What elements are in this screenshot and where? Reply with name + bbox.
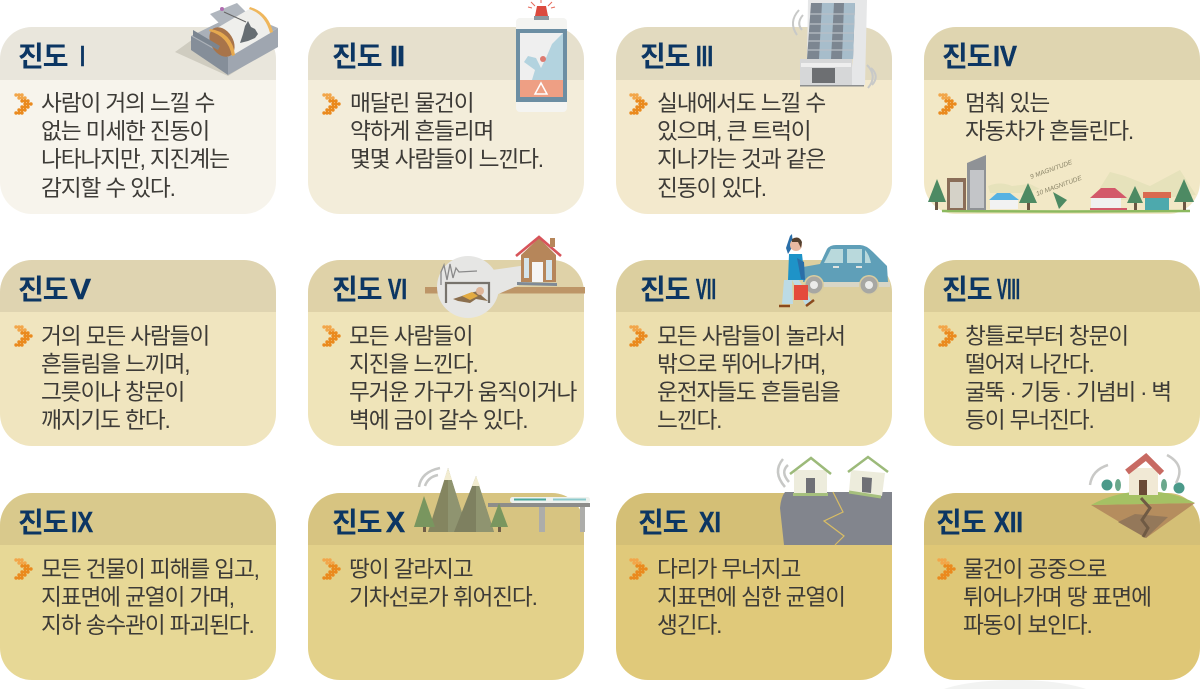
text: description: 나타나지만, 지진계는 — [41, 146, 229, 172]
heading: 진도 IV — [942, 41, 1018, 73]
panel: 진도 VIII — [924, 260, 1200, 446]
text: description: 깨지기도 한다. — [41, 407, 170, 433]
icon: arrow — [629, 325, 648, 347]
text: description: 몇몇 사람들이 느낀다. — [350, 146, 543, 172]
text: description — [965, 90, 1133, 144]
heading: 진도 VII — [640, 274, 716, 306]
text: description — [657, 323, 845, 433]
heading: 진도 XII: XII — [994, 507, 1023, 539]
icon: arrow — [322, 325, 341, 347]
text: description: 실내에서도 느낄 수 — [657, 90, 825, 116]
text: description: 거의 모든 사람들이 — [41, 323, 209, 349]
icon: person and car — [779, 234, 890, 306]
text: description: 진동이 있다. — [657, 175, 766, 201]
heading: 진도 XI — [638, 507, 721, 539]
text: description — [41, 90, 229, 201]
text: description — [349, 323, 578, 433]
icon: houses on cracked ground — [778, 457, 892, 545]
heading: 진도 X: 진도 — [332, 507, 382, 538]
heading: 진도 XI: XI — [699, 507, 721, 539]
heading: 진도 I: I — [80, 41, 85, 73]
text: description: 굴뚝 · 기둥 · 기념비 · 벽 — [965, 379, 1171, 405]
panel: 진도 IX — [0, 493, 276, 680]
heading: 진도 III: III — [696, 41, 713, 73]
text: description: 밖으로 뛰어나가며, — [657, 351, 825, 377]
icon: arrow — [629, 93, 648, 115]
text: description: 멈춰 있는 — [965, 90, 1049, 116]
icon: arrow — [14, 93, 33, 115]
heading: 진도 VI: 진도 — [332, 274, 382, 305]
text: description — [350, 90, 543, 172]
heading: 진도 XI: 진도 — [638, 507, 688, 538]
icon: arrow — [938, 325, 957, 347]
text: description — [349, 556, 537, 610]
text: description: 기차선로가 휘어진다. — [349, 584, 537, 610]
heading: 진도 V — [18, 274, 92, 306]
heading: 진도 III — [640, 41, 713, 73]
heading: 진도 I: 진도 — [18, 41, 68, 72]
heading: 진도 X: X — [386, 507, 406, 539]
icon: arrow — [14, 325, 33, 347]
heading: 진도 II — [332, 41, 405, 73]
panel: 진도 I — [0, 3, 278, 214]
text: description: 사람이 거의 느낄 수 — [41, 90, 215, 116]
text: description: 매달린 물건이 — [350, 90, 474, 116]
text: description: 지표면에 균열이 가며, — [41, 584, 234, 610]
text: description: 벽에 금이 갈수 있다. — [349, 407, 527, 433]
text: description: 운전자들도 흔들림을 — [657, 379, 840, 405]
icon: phone with siren — [516, 0, 567, 112]
icon: shaking building — [793, 0, 876, 88]
icon: house on floating island — [1090, 455, 1195, 538]
heading: 진도 VII: 진도 — [640, 274, 690, 305]
heading: 진도 VIII: 진도 — [942, 274, 992, 305]
text: description: 등이 무너진다. — [965, 407, 1094, 433]
text: description: 지진을 느낀다. — [349, 351, 478, 377]
heading: 진도 IV: 진도 — [942, 41, 992, 72]
panel: 진도 VII — [616, 234, 892, 446]
heading: 진도 XII: 진도 — [936, 507, 986, 538]
text: description: 파동이 보인다. — [963, 612, 1092, 638]
text: description: 없는 미세한 진동이 — [41, 118, 209, 144]
text: description — [965, 323, 1171, 433]
text: description: 흔들림을 느끼며, — [41, 351, 189, 377]
heading: 진도 VII: VII — [696, 274, 716, 306]
panel: 진도 VI — [308, 237, 585, 446]
text: description: 모든 사람들이 놀라서 — [657, 323, 845, 349]
text: description — [657, 556, 845, 638]
heading: 진도 IX: IX — [71, 507, 94, 539]
text: description: 모든 건물이 피해를 입고, — [41, 556, 259, 582]
heading: 진도 VI — [332, 274, 407, 306]
text: description: 지하 송수관이 파괴된다. — [41, 612, 254, 638]
text: description: 생긴다. — [657, 612, 721, 638]
text: description: 약하게 흔들리며 — [350, 118, 493, 144]
panel: 진도 II — [308, 0, 584, 214]
text: description — [963, 556, 1151, 638]
text: description: 지표면에 심한 균열이 — [657, 584, 845, 610]
text: description: 있으며, 큰 트럭이 — [657, 118, 811, 144]
heading: 진도 V: 진도 — [18, 274, 68, 305]
heading: 진도 VIII — [942, 274, 1020, 306]
panel: 진도 XI — [616, 457, 892, 680]
text: description: 물건이 공중으로 — [963, 556, 1106, 582]
heading: 진도 VI: VI — [388, 274, 407, 306]
heading: 진도 II: II — [390, 41, 405, 73]
heading: 진도 IX: 진도 — [18, 507, 68, 538]
icon: arrow — [322, 93, 341, 115]
illustration: town with waves: 10 MAGNITUDE — [1035, 175, 1083, 198]
icon: seismograph — [175, 3, 278, 76]
text: description: 다리가 무너지고 — [657, 556, 800, 582]
text: description: 창틀로부터 창문이 — [965, 323, 1128, 349]
icon: arrow — [629, 558, 648, 580]
decorative faint shape — [930, 680, 1100, 689]
text: description — [41, 556, 259, 638]
icon: arrow — [322, 558, 341, 580]
text: description: 땅이 갈라지고 — [349, 556, 473, 582]
illustration: town with waves — [928, 155, 1196, 212]
text: description — [41, 323, 209, 433]
heading: 진도 VIII: VIII — [997, 274, 1020, 306]
heading: 진도 XII — [936, 507, 1023, 539]
heading: 진도 II: 진도 — [332, 41, 382, 72]
illustration: town with waves: 9 MAGNITUDE — [1029, 159, 1074, 181]
text: description: 튀어나가며 땅 표면에 — [963, 584, 1151, 610]
panel: 진도 X — [308, 468, 590, 680]
heading: 진도 IV: IV — [993, 41, 1018, 73]
text: description — [657, 90, 825, 201]
text: description: 모든 사람들이 — [349, 323, 472, 349]
panel: 진도 V — [0, 260, 276, 446]
text: description: 자동차가 흔들린다. — [965, 118, 1133, 144]
icon: arrow — [14, 558, 33, 580]
text: description: 그릇이나 창문이 — [41, 379, 184, 405]
heading: 진도 X — [332, 507, 406, 539]
panel: 진도 XII — [924, 455, 1200, 680]
heading: 진도 IX — [18, 507, 94, 539]
panel: 진도 IV — [924, 27, 1200, 214]
panel: 진도 III — [616, 0, 892, 214]
icon: arrow — [938, 93, 957, 115]
text: description: 느낀다. — [657, 407, 721, 433]
icon: mountains and train bridge — [414, 468, 590, 532]
icon: house and person under table — [425, 237, 585, 318]
text: description: 떨어져 나간다. — [965, 351, 1094, 377]
text: description: 감지할 수 있다. — [41, 175, 175, 201]
heading: 진도 III: 진도 — [640, 41, 690, 72]
icon: arrow — [937, 558, 956, 580]
heading: 진도 V: V — [70, 274, 92, 306]
text: description: 지나가는 것과 같은 — [657, 146, 825, 172]
text: description: 무거운 가구가 움직이거나 — [349, 379, 578, 405]
